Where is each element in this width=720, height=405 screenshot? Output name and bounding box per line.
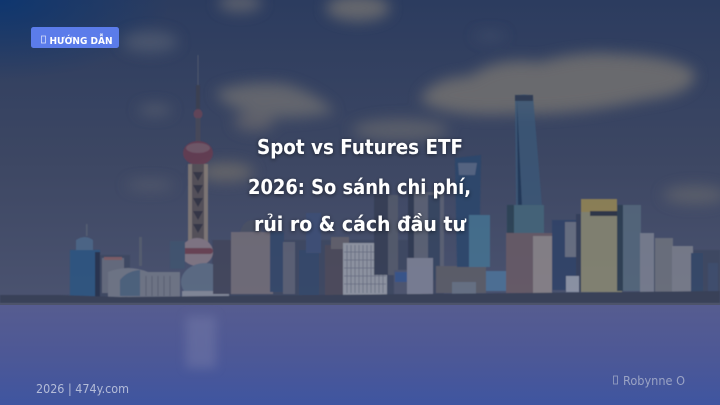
footer: author: Robynne O xyxy=(623,374,685,388)
midtown buildings xyxy=(213,192,522,296)
badge: HƯỚNG DẪN xyxy=(31,27,119,48)
far buildings haze xyxy=(100,240,720,300)
towers: right skyline xyxy=(552,199,718,295)
tower: Oriental Pearl xyxy=(181,55,229,301)
water xyxy=(0,305,720,405)
tower: Shanghai Tower xyxy=(506,94,552,293)
icon: missing glyph box xyxy=(42,36,46,43)
icon: missing glyph box author xyxy=(614,376,618,384)
title: 2026: So sánh chi phí, xyxy=(248,175,471,199)
title: rủi ro & cách đầu tư xyxy=(254,212,467,236)
skyline xyxy=(0,55,720,306)
title: Spot vs Futures ETF xyxy=(257,135,463,159)
shoreline xyxy=(0,291,720,306)
clouds xyxy=(122,0,720,204)
low buildings left xyxy=(102,237,185,298)
title xyxy=(248,135,471,236)
badge: HƯỚNG DẪN: HƯỚNG DẪN xyxy=(50,32,112,47)
tower: left blue building xyxy=(70,224,100,297)
tower: Shanghai WFC xyxy=(455,155,490,267)
footer: year and site: 2026 | 474y.com xyxy=(36,382,129,396)
